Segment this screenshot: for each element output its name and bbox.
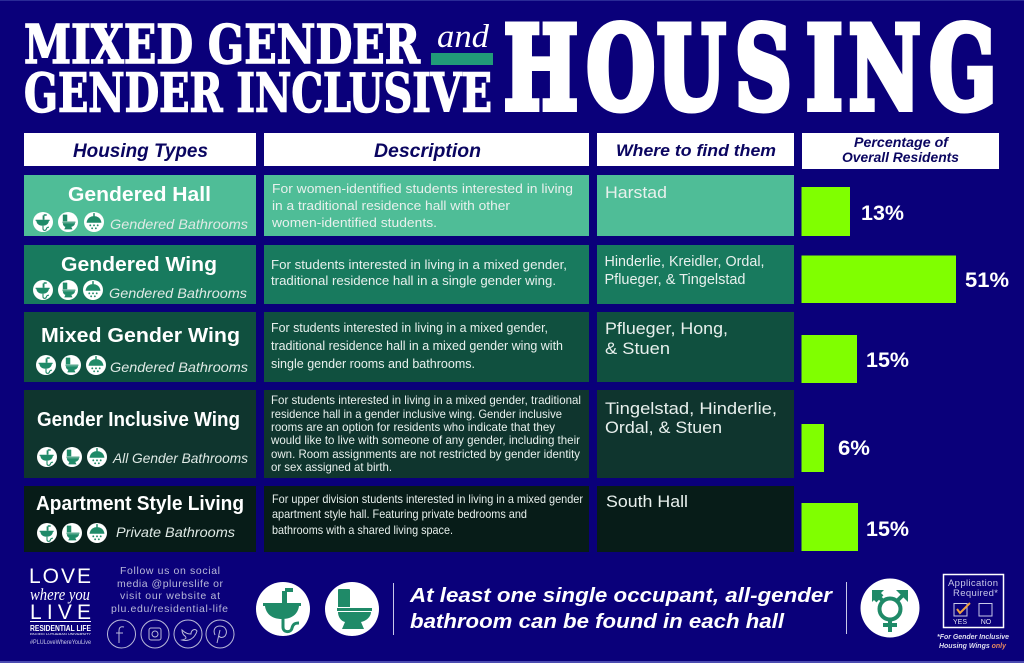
application footnote: *For Gender Inclusive (937, 634, 1009, 641)
bar: 51%: 51% (965, 269, 1009, 292)
row: gendered hall: Harstad (605, 183, 667, 202)
row: gender inclusive wing: Tingelstad, Hinderlie, (605, 399, 777, 418)
callout (409, 585, 833, 633)
bar: 13%: 13% (861, 202, 904, 225)
logo: love where you live (29, 565, 92, 646)
row: gender inclusive wing: rooms are an option for residents who indicate that they (271, 420, 555, 434)
row: mixed gender wing: & Stuen (605, 339, 670, 358)
social icons (108, 620, 234, 648)
column headers: Overall Residents (842, 150, 959, 165)
column headers (24, 133, 999, 169)
social text: plu.edu/residential-life (111, 603, 228, 615)
row: gendered wing: Gendered Wing (61, 254, 217, 276)
row: mixed gender wing: single gender rooms and bathrooms. (271, 356, 475, 371)
callout: bathroom can be found in each hall (410, 611, 784, 633)
row: gendered hall: in a traditional residence hall with other (272, 198, 511, 213)
row: gender inclusive wing: Gender Inclusive Wing (37, 409, 240, 431)
application required box: NO (981, 619, 992, 626)
logo: love where you live: #PLULoveWhereYouLive (30, 640, 92, 646)
social text: visit our website at (120, 590, 220, 602)
logo: love where you live: LOVE (29, 565, 91, 588)
row: gendered hall: Gendered Bathrooms (110, 216, 248, 232)
bar: 15%: 15% (866, 518, 909, 541)
row: mixed gender wing (24, 312, 794, 382)
application footnote: Housing Wings only (939, 643, 1007, 650)
row: mixed gender wing: Pflueger, Hong, (605, 319, 728, 338)
icon: transgender symbol (860, 578, 920, 638)
icon: sink (256, 582, 310, 636)
row: gender inclusive wing: Ordal, & Stuen (605, 418, 722, 437)
row: mixed gender wing: traditional residence hall in a mixed gender wing with (271, 338, 563, 353)
row: gendered hall: women-identified students. (271, 215, 437, 230)
row: gender inclusive wing: own. Room assignments are not restricted by gender identity (271, 447, 580, 461)
row: mixed gender wing: For students interested in living in a mixed gender, (271, 320, 548, 335)
row: gender inclusive wing: residence hall in a gender inclusive wing. Gender inclusive (271, 407, 562, 421)
title: and (437, 19, 490, 55)
logo: love where you live: PACIFIC LUTHERAN UNIVERSITY (30, 632, 91, 636)
divider (393, 583, 394, 635)
row: apartment style living: apartment style hall. Featuring private bedrooms and (272, 507, 527, 521)
row: gender inclusive wing: would like to live with someone of any gender, including their (270, 433, 580, 447)
title: HOUSING (504, 3, 997, 136)
application footnote (937, 634, 1009, 650)
row: gendered wing: traditional residence hall in a single gender wing. (271, 273, 556, 288)
divider (846, 582, 847, 634)
logo: love where you live: RESIDENTIAL LIFE (30, 624, 92, 633)
row: gender inclusive wing: All Gender Bathrooms (112, 450, 248, 466)
title: GENDER INCLUSIVE (24, 62, 492, 124)
application required box: YES (953, 619, 967, 626)
bar: 15% (802, 335, 909, 383)
row: apartment style living (24, 486, 794, 552)
row: gendered wing: Gendered Bathrooms (109, 285, 247, 301)
row: gendered wing: Pflueger, & Tingelstad (604, 271, 746, 288)
row: apartment style living: South Hall (606, 492, 688, 511)
social text: media @plureslife or (117, 578, 224, 590)
row: gender inclusive wing: For students interested in living in a mixed gender, traditional (271, 393, 581, 407)
title (24, 3, 997, 136)
row: gendered hall (24, 175, 794, 236)
application required box (944, 574, 1004, 628)
logo: love where you live: LIVE (30, 601, 91, 624)
row: apartment style living: Private Bathrooms (116, 524, 235, 540)
row: gender inclusive wing (24, 390, 794, 478)
bar: 13% (802, 187, 904, 236)
application required box: Required* (953, 588, 998, 599)
social text: Follow us on social (120, 565, 220, 577)
row: mixed gender wing: Gendered Bathrooms (110, 359, 248, 375)
bar: 15%: 15% (866, 349, 909, 372)
column headers: Percentage of (854, 135, 950, 150)
logo: love where you live: where you (30, 585, 90, 604)
bar: 6%: 6% (838, 437, 870, 460)
callout: At least one single occupant, all-gender (409, 585, 833, 607)
row: gendered hall: Gendered Hall (68, 184, 211, 206)
row: mixed gender wing: Mixed Gender Wing (41, 325, 240, 347)
bar: 6% (802, 424, 870, 472)
application required box: Application (948, 578, 998, 589)
row: gendered wing (24, 245, 794, 304)
row: gendered hall: For women-identified students interested in living (272, 181, 573, 196)
social text (111, 565, 228, 615)
row: apartment style living: bathrooms with a shared living space. (272, 523, 453, 537)
row: apartment style living: Apartment Style Living (36, 493, 244, 515)
title: MIXED GENDER (24, 14, 421, 76)
column headers: Housing Types (73, 141, 208, 162)
bar: 15% (802, 503, 909, 551)
row: gender inclusive wing: or sex assigned at birth. (271, 460, 392, 474)
bar: 51% (802, 256, 1009, 303)
row: apartment style living: For upper division students interested in living in a mixed gender (272, 492, 583, 506)
row: gendered wing: For students interested in living in a mixed gender, (271, 257, 567, 272)
column headers: Where to find them (616, 141, 776, 160)
row: gendered wing: Hinderlie, Kreidler, Ordal, (604, 253, 764, 270)
icon: toilet (325, 582, 379, 636)
column headers: Description (374, 141, 481, 162)
